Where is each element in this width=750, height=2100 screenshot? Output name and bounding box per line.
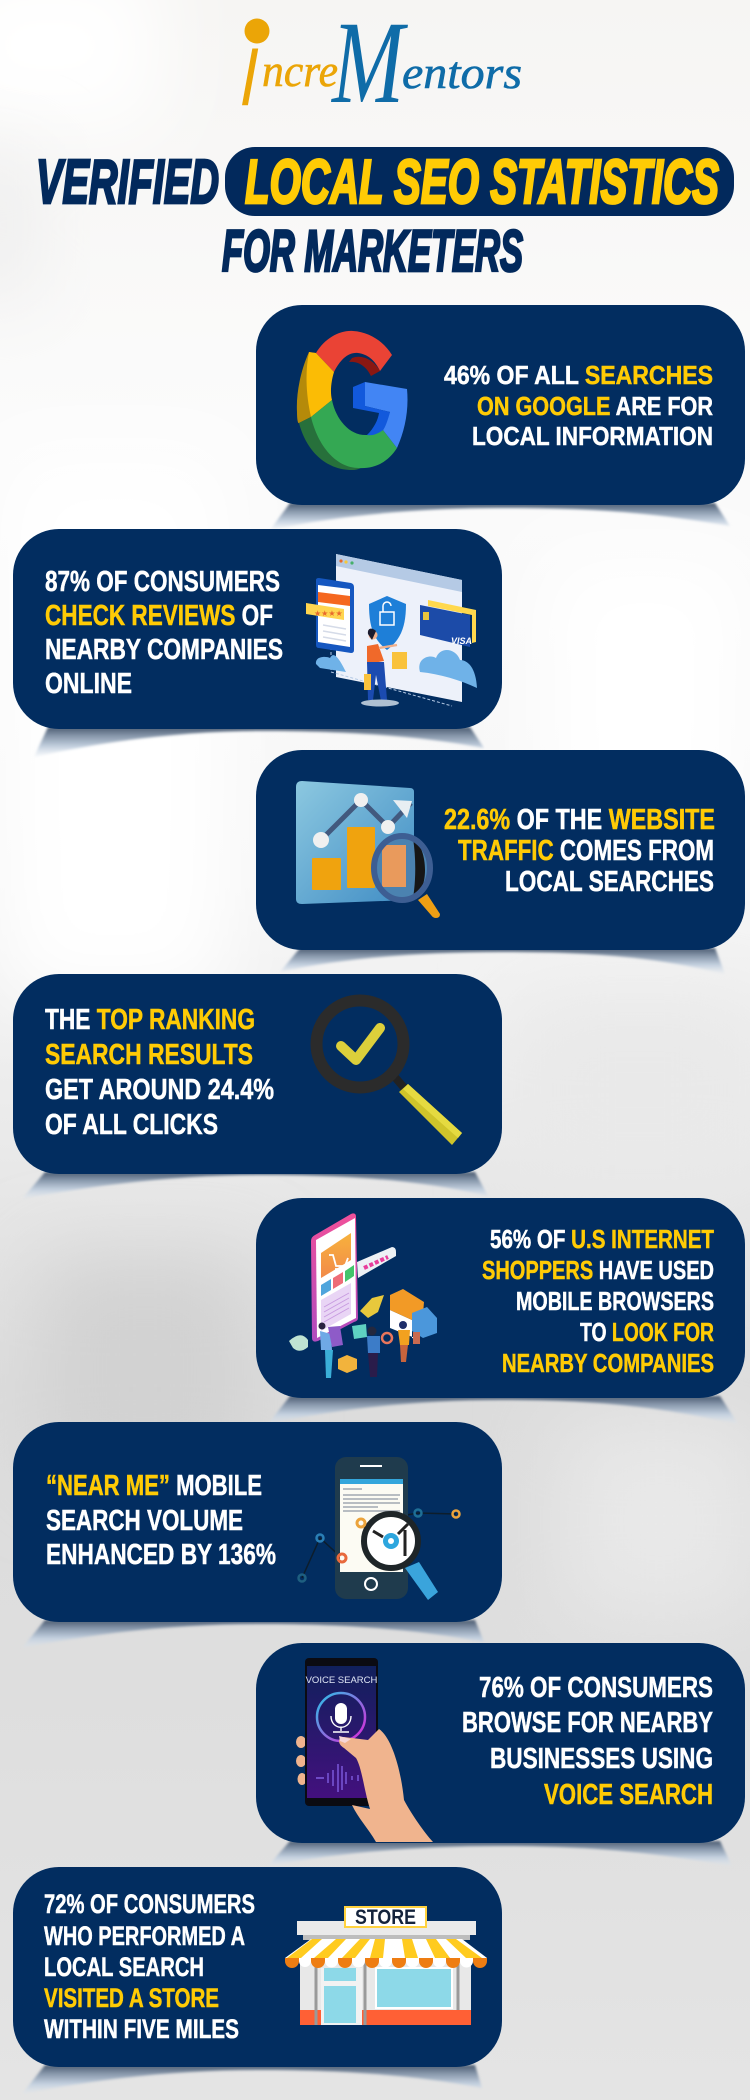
stat text: NEARBY COMPANIES — [45, 634, 283, 666]
stat text: LOCAL SEARCH — [44, 1952, 204, 1982]
icon: online reviews illustration: VISA — [451, 636, 472, 646]
stat text: OF ALL CLICKS — [45, 1109, 218, 1141]
panel: top ranking clicks — [13, 974, 502, 1199]
title — [36, 147, 734, 284]
stat text: CHECK REVIEWS OF — [45, 600, 273, 632]
panel: 56% mobile browsers — [256, 1198, 745, 1424]
icon: mobile shopping illustration — [289, 1213, 437, 1378]
icon: analytics magnifier — [296, 781, 440, 918]
stat text — [482, 1224, 714, 1378]
panel: 46% searches — [256, 305, 745, 530]
stat text: VISITED A STORE — [44, 1983, 219, 2013]
logo: IncreMentors: ncre — [262, 45, 338, 96]
store sign: STORE — [355, 1906, 416, 1929]
icon: google G — [297, 331, 408, 470]
clouds — [419, 650, 477, 688]
icon: online reviews illustration: ★★★★ — [314, 609, 343, 618]
stat text: SEARCH RESULTS — [45, 1039, 253, 1071]
stat text: GET AROUND 24.4% — [45, 1074, 274, 1106]
stat text: ENHANCED BY 136% — [46, 1539, 276, 1571]
stat text — [45, 1004, 274, 1141]
logo: IncreMentors: entors — [402, 47, 522, 98]
stat text: “NEAR ME” MOBILE — [46, 1470, 262, 1502]
stat text: LOCAL INFORMATION — [472, 421, 713, 451]
panel: 87% reviews — [13, 529, 502, 757]
stat text: 72% OF CONSUMERS — [44, 1889, 255, 1919]
title word: verified: VERIFIED — [36, 148, 219, 217]
stat text — [44, 1889, 255, 2044]
stat text: 22.6% OF THE WEBSITE — [444, 804, 715, 836]
title pill — [225, 147, 734, 216]
stat text: SEARCH VOLUME — [46, 1505, 243, 1537]
truck — [390, 1310, 420, 1340]
icon: hand holding phone: VOICE SEARCH — [306, 1675, 378, 1686]
stat text: THE TOP RANKING — [45, 1004, 255, 1036]
icon: store — [285, 1906, 487, 2025]
icon: hand holding phone — [296, 1658, 433, 1842]
stat text: 87% OF CONSUMERS — [45, 566, 280, 598]
panel: near me — [13, 1422, 502, 1648]
panel: voice search — [256, 1643, 745, 1866]
stat text: ON GOOGLE ARE FOR — [477, 391, 713, 421]
title second line: FOR MARKETERS — [222, 219, 523, 284]
stat text: 56% OF U.S INTERNET — [490, 1224, 714, 1254]
stat text: SHOPPERS HAVE USED — [482, 1255, 714, 1285]
stat text: ONLINE — [45, 668, 132, 700]
stat text — [444, 360, 713, 451]
stat text: WITHIN FIVE MILES — [44, 2014, 239, 2044]
person — [368, 630, 378, 640]
logo: IncreMentors — [238, 0, 522, 128]
stat text: TO LOOK FOR — [580, 1317, 714, 1347]
stat text: 46% OF ALL SEARCHES — [444, 360, 713, 390]
icon: magnifier with check — [316, 1000, 462, 1145]
logo: IncreMentors: M — [331, 0, 408, 128]
stat text: WHO PERFORMED A — [44, 1921, 245, 1951]
icon: phone with magnifier — [298, 1457, 460, 1600]
panel: 22.6% traffic — [256, 750, 745, 974]
logo: IncreMentors: I — [238, 30, 260, 124]
stat text — [46, 1470, 276, 1571]
panel: store visits — [13, 1867, 502, 2094]
stat text — [462, 1672, 713, 1811]
stat text — [45, 566, 283, 700]
icon: online reviews illustration — [306, 554, 477, 706]
people — [318, 1322, 326, 1330]
stat text — [444, 804, 715, 898]
